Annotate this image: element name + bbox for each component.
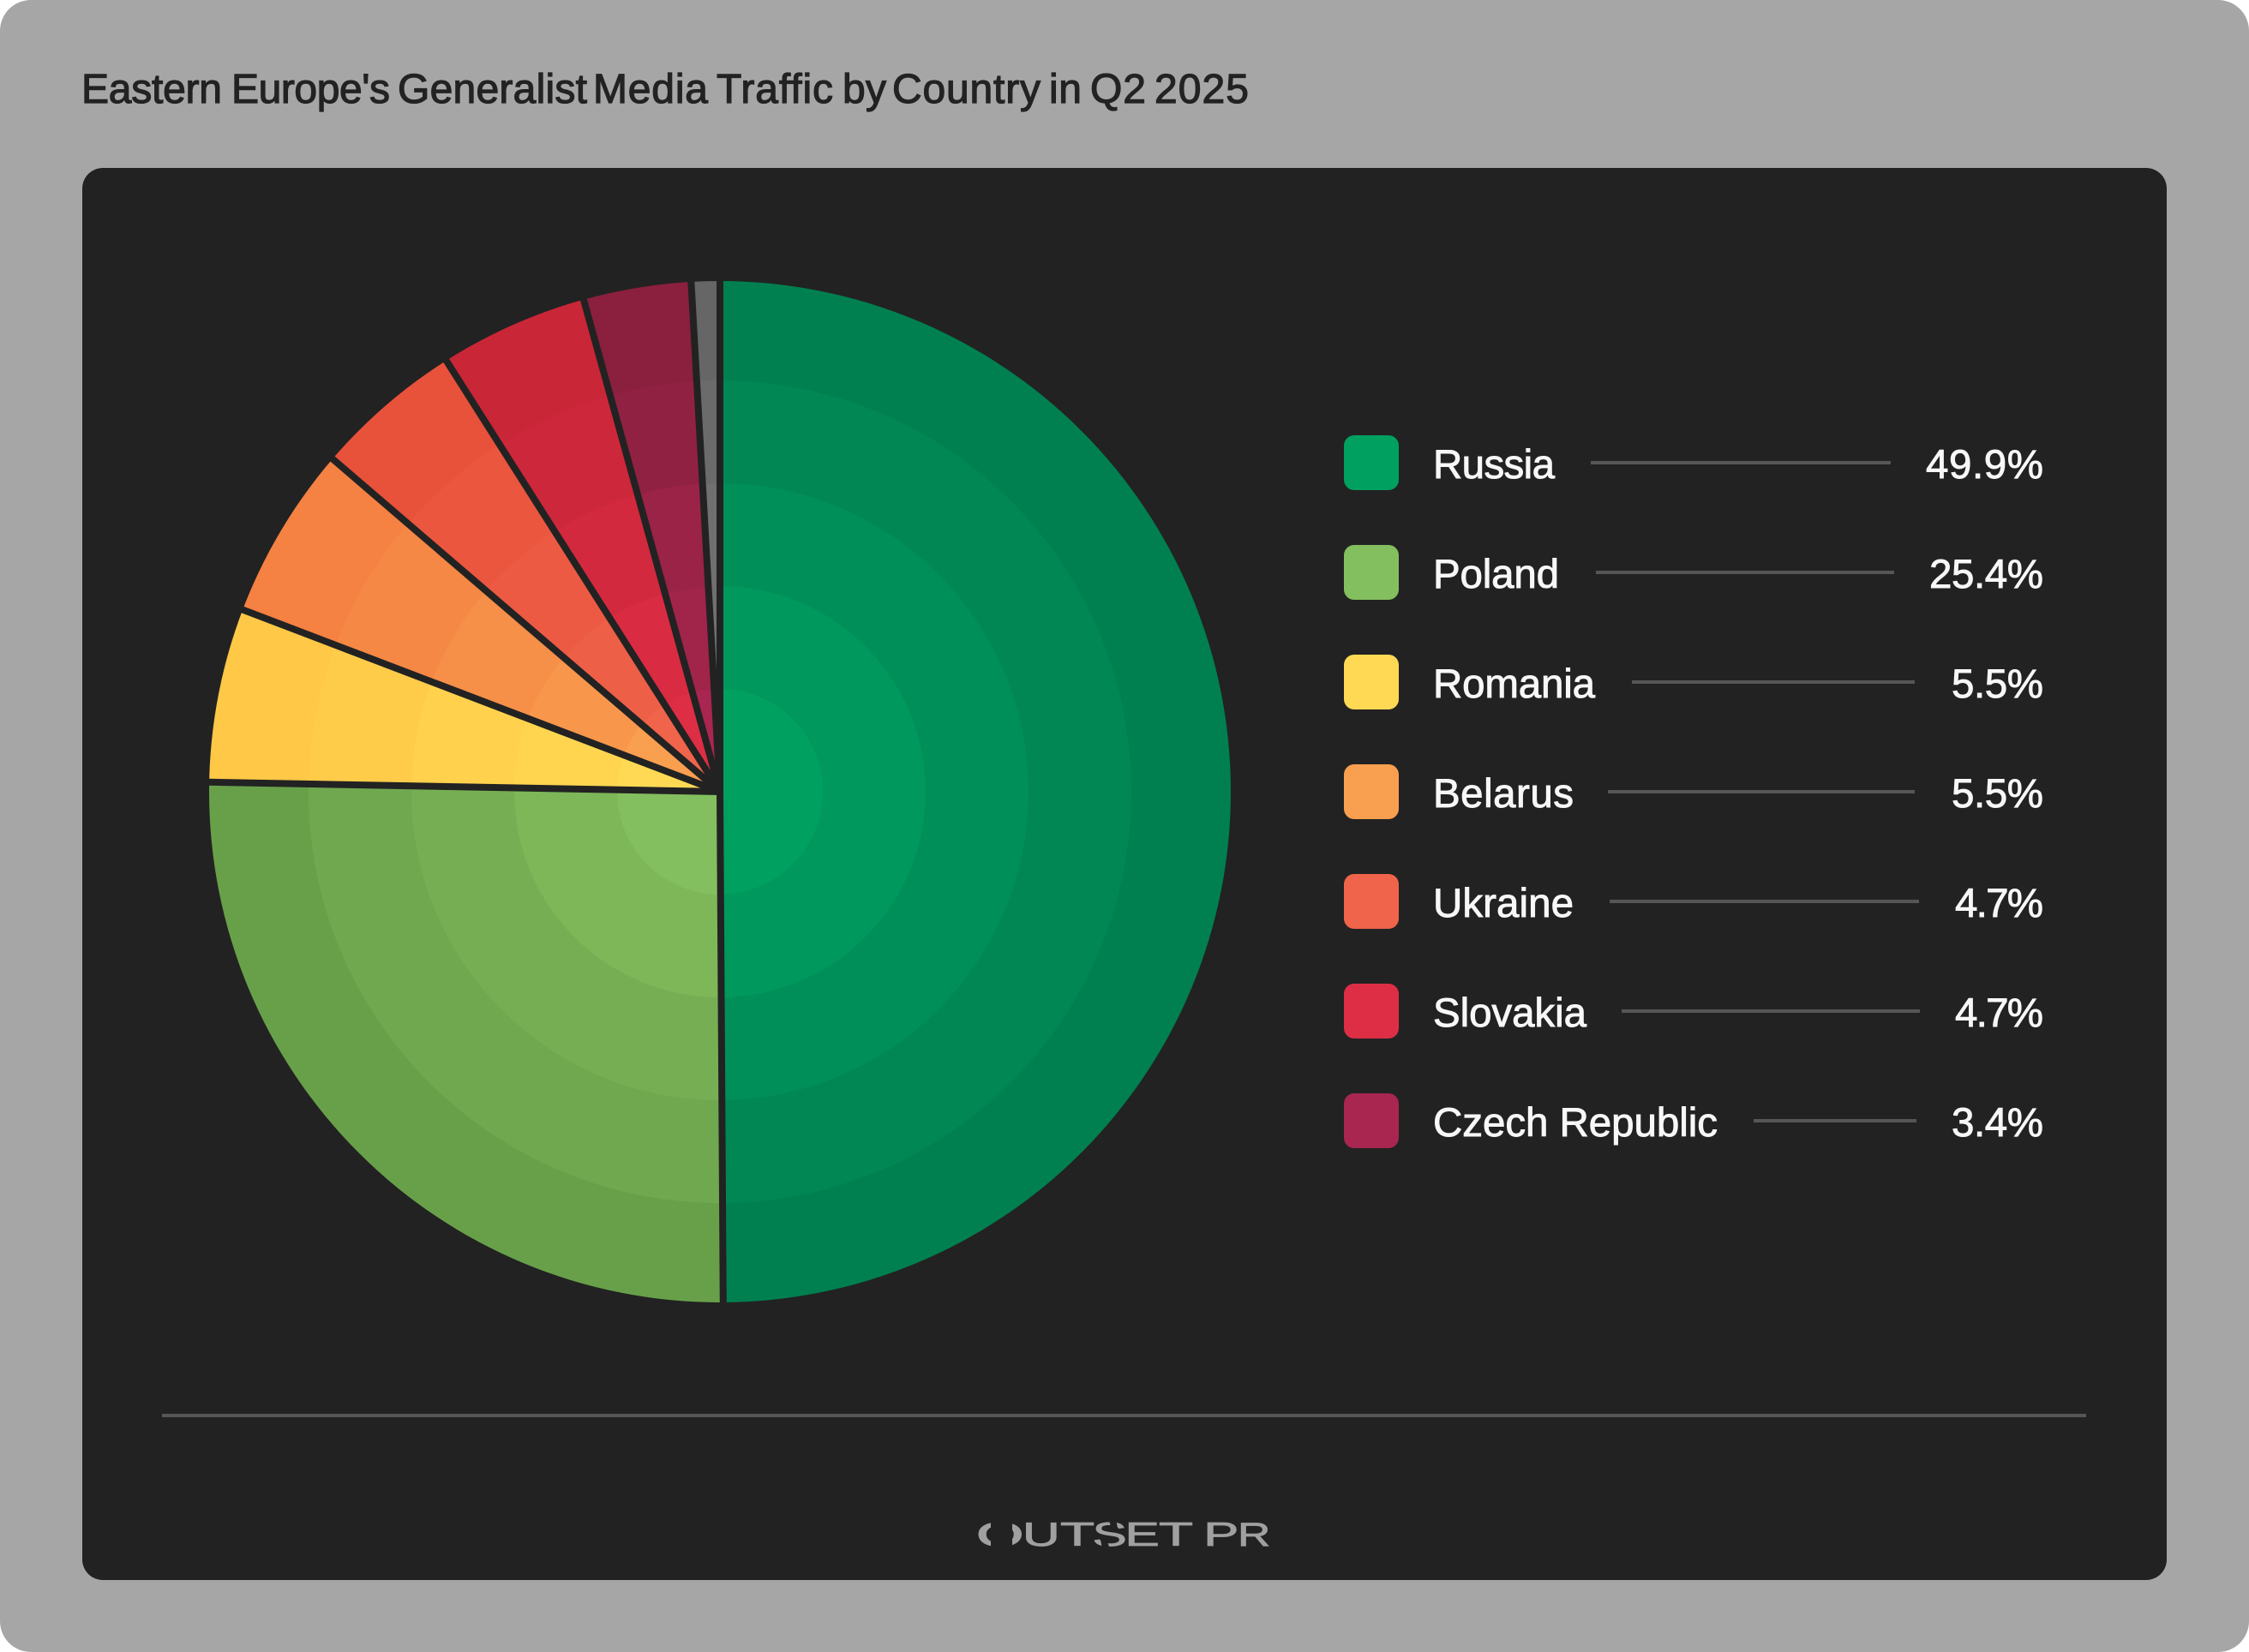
title: in [1049,67,1082,112]
title: Country [892,67,1041,112]
title: Eastern [81,67,222,112]
slice: Romania 5.5% [209,613,701,788]
legend row: Belarus [1344,764,2043,819]
title: by [843,67,886,112]
legend row: Romania: 5.5% [1952,661,2043,707]
legend row: Russia: Russia [1433,442,1556,488]
title: Media [593,67,708,112]
legend row: Poland [1344,545,2043,600]
logo: OUTSET PR: U [1023,1516,1060,1553]
logo: OUTSET PR: T [1159,1516,1193,1553]
slice: Russia 49.9% [723,281,1231,1302]
legend row: Belarus: 5.5% [1952,771,2043,817]
title: Q2 [1090,67,1146,112]
legend row: Poland: Poland [1433,552,1559,597]
logo: OUTSET PR: R [1238,1516,1270,1553]
slice: Poland 25.4% [209,785,720,1302]
legend row: Slovakia: 4.7% [1955,991,2043,1036]
logo: OUTSET PR: S [1092,1516,1127,1553]
slice: Czech Republic 3.4% [586,282,715,760]
legend row: Ukraine [1344,874,2043,929]
legend row: Romania [1344,655,2043,709]
logo: OUTSET PR: P [1203,1515,1238,1553]
legend row: Russia [1344,435,2043,490]
legend row: Russia: 49.9% [1926,442,2043,488]
logo: OUTSET PR: O [977,1517,1023,1553]
legend row: Czech Republic [1344,1093,2043,1148]
slice: other countries [694,281,717,670]
title: Generalist [398,67,587,112]
legend row: Poland: 25.4% [1929,552,2043,597]
legend row: Slovakia: Slovakia [1433,991,1587,1036]
pie chart [189,260,1231,1323]
logo: OUTSET PR: E [1124,1516,1160,1553]
slice: Belarus 5.5% [243,461,703,781]
legend row: Ukraine: Ukraine [1433,881,1574,926]
legend [1344,435,2043,1148]
logo: OUTSET PR [977,1515,1270,1553]
title: Europe's [231,67,390,112]
title: Traffic [717,67,833,112]
slice: Ukraine 4.7% [334,362,705,775]
legend row: Ukraine: 4.7% [1955,881,2043,926]
legend row: Slovakia [1344,984,2043,1038]
legend row: Czech Republic: Czech Republic [1433,1100,1718,1146]
logo: OUTSET PR: T [1060,1516,1095,1553]
legend row: Czech Republic: 3.4% [1952,1100,2043,1146]
legend row: Romania: Romania [1433,661,1596,707]
legend row: Belarus: Belarus [1433,771,1574,817]
slice: Slovakia 4.7% [449,300,711,771]
footer divider [162,1414,2086,1417]
panel: dark chart panel [82,168,2167,1580]
title: 2025 [1154,67,1249,112]
